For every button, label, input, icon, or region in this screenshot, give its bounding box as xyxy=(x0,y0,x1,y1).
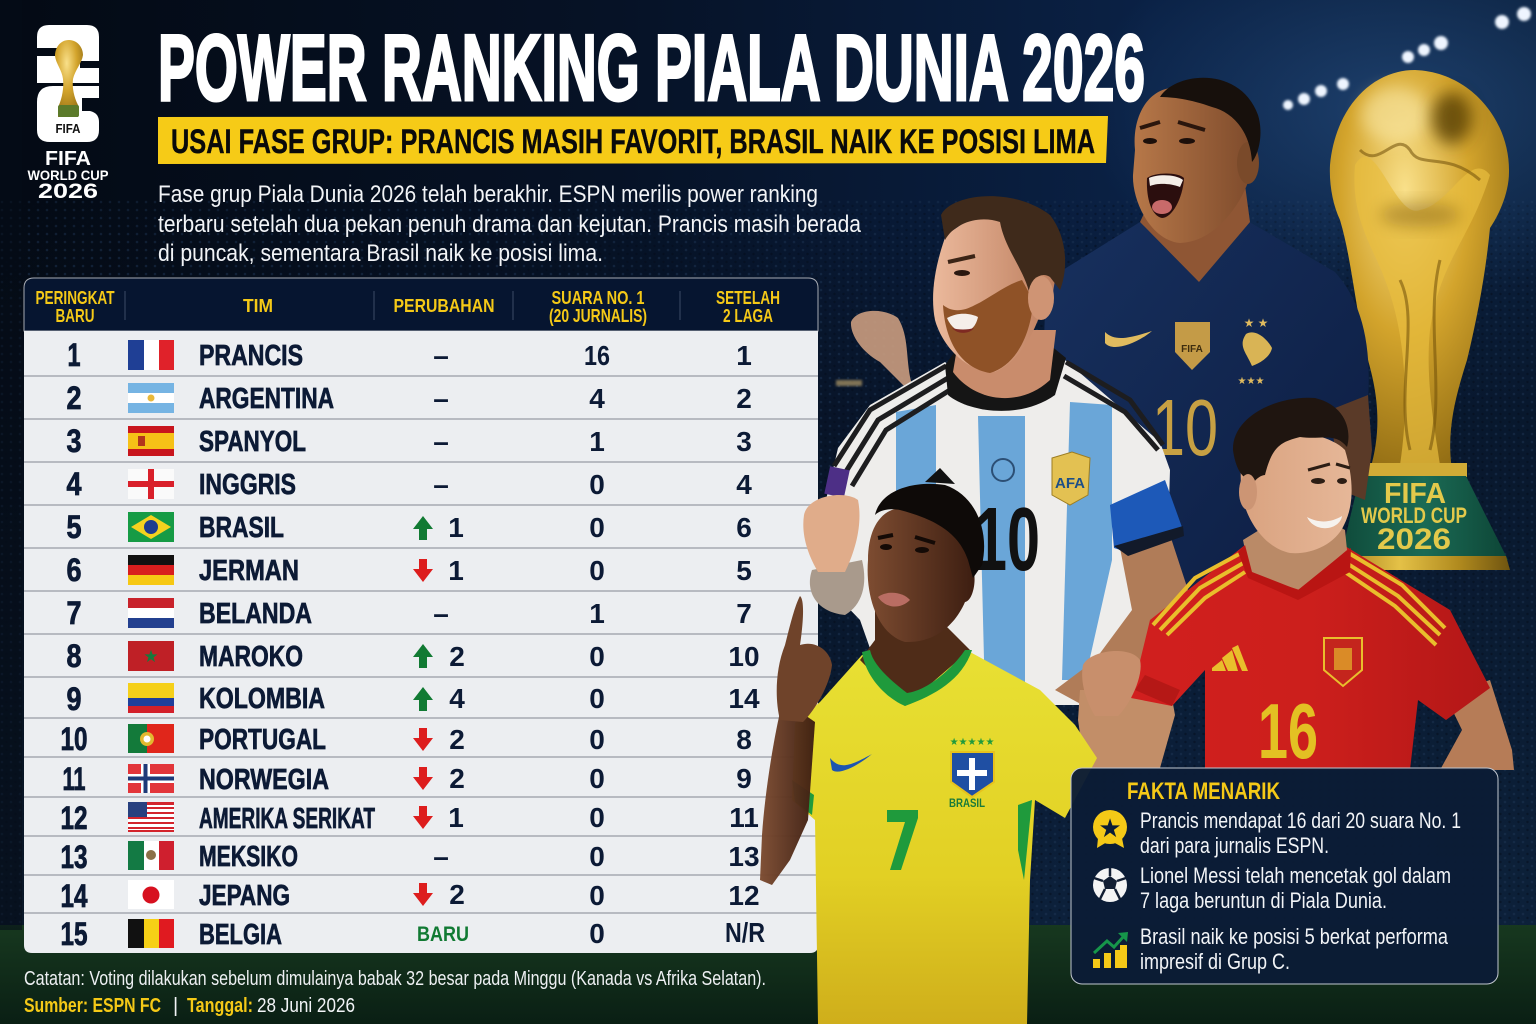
arrow down xyxy=(413,806,433,829)
intro paragraph: terbaru setelah dua pekan penuh drama dan kejutan. Prancis masih berada xyxy=(158,211,862,238)
logo wordmark: 2026 xyxy=(38,180,98,203)
row 9: Kolombia: KOLOMBIA xyxy=(199,683,325,715)
jersey details: France: FIFA xyxy=(1181,344,1203,355)
flag: Morocco xyxy=(128,641,174,671)
row 6: Jerman: 0 xyxy=(589,555,605,586)
arrow up xyxy=(413,687,433,711)
fact 3: Brasil naik ke posisi 5 berkat performa xyxy=(1140,924,1449,949)
row 1: Prancis: 1 xyxy=(736,340,752,371)
source and date: Sumber: ESPN FC xyxy=(24,995,161,1017)
source and date: | xyxy=(173,995,178,1017)
table header: PERINGKAT xyxy=(36,288,115,308)
jersey details: France xyxy=(1105,316,1272,472)
jersey details: Brazil: BRASIL xyxy=(949,796,985,810)
row 5: Brasil xyxy=(66,509,752,545)
row 1: Prancis: 1 xyxy=(68,337,80,373)
table header: PERUBAHAN xyxy=(394,296,494,316)
fact 2: 7 laga beruntun di Piala Dunia. xyxy=(1140,888,1387,913)
row 8: Maroko: 10 xyxy=(728,641,760,672)
source and date xyxy=(24,995,355,1017)
panel heading: FAKTA MENARIK xyxy=(1127,778,1281,805)
row 12: Amerika Serikat: 1 xyxy=(448,802,464,833)
flag: USA xyxy=(128,802,174,832)
row 7: Belanda: 7 xyxy=(66,595,82,631)
player: Brazil number 7 xyxy=(760,484,1097,1024)
row 11: Norwegia: NORWEGIA xyxy=(199,764,329,796)
table header: (20 JURNALIS) xyxy=(549,306,647,326)
row 15: Belgia: 0 xyxy=(589,918,605,949)
row 7: Belanda: 7 xyxy=(736,598,752,629)
flag: Brazil xyxy=(128,512,174,542)
icon: medal star: ★ xyxy=(1098,814,1122,844)
table header: 2 LAGA xyxy=(723,306,773,326)
icon: medal star xyxy=(1093,810,1127,848)
row 12: Amerika Serikat xyxy=(60,800,759,836)
row 3: Spanyol xyxy=(66,423,752,459)
row 14: Jepang xyxy=(60,878,760,914)
row 2: Argentina: – xyxy=(433,383,449,414)
row 9: Kolombia: 0 xyxy=(589,683,605,714)
arrow down xyxy=(413,728,433,751)
row 5: Brasil: BRASIL xyxy=(199,512,284,544)
row 5: Brasil: 0 xyxy=(589,512,605,543)
row 1: Prancis: 16 xyxy=(584,340,610,371)
row 4: Inggris: INGGRIS xyxy=(199,469,296,501)
jersey details: Argentina: AFA xyxy=(1055,475,1085,492)
intro paragraph: di puncak, sementara Brasil naik ke posisi lima. xyxy=(158,240,603,267)
row 6: Jerman: 6 xyxy=(66,552,82,588)
row 13: Meksiko: 13 xyxy=(60,839,88,875)
row 5: Brasil: 6 xyxy=(736,512,752,543)
row 4: Inggris: 4 xyxy=(66,466,82,502)
row 3: Spanyol: – xyxy=(433,426,449,457)
row 13: Meksiko xyxy=(60,839,760,875)
row 3: Spanyol: 1 xyxy=(589,426,605,457)
row 6: Jerman: 1 xyxy=(448,555,464,586)
flag: Netherlands xyxy=(128,598,174,628)
trophy base with text xyxy=(1340,476,1510,570)
row 10: Portugal xyxy=(60,721,752,757)
row 9: Kolombia: 4 xyxy=(449,683,465,714)
jersey details: Brazil xyxy=(830,737,994,870)
row 10: Portugal: 8 xyxy=(736,724,752,755)
flag: Portugal xyxy=(128,724,174,753)
row 12: Amerika Serikat: 0 xyxy=(589,802,605,833)
intro paragraph: Fase grup Piala Dunia 2026 telah berakhir. ESPN merilis power ranking xyxy=(158,181,818,208)
row 1: Prancis xyxy=(68,337,752,373)
source and date: 28 Juni 2026 xyxy=(257,995,355,1017)
row 10: Portugal: PORTUGAL xyxy=(199,724,326,756)
icon: soccer ball xyxy=(1093,868,1127,902)
row 15: Belgia: N/R xyxy=(725,917,765,948)
row 8: Maroko: 0 xyxy=(589,641,605,672)
icon: white 26 emblem: FIFA xyxy=(56,121,81,136)
flag: France xyxy=(128,340,174,370)
row 1: Prancis: PRANCIS xyxy=(199,340,303,372)
panel: fakta menarik xyxy=(1071,768,1498,984)
icon: white 26 emblem xyxy=(37,25,99,142)
flag: Norway xyxy=(128,764,174,793)
arrow down xyxy=(413,883,433,906)
flag: Mexico xyxy=(128,841,174,870)
row 14: Jepang: JEPANG xyxy=(199,880,290,912)
row 3: Spanyol: SPANYOL xyxy=(199,426,306,458)
row 5: Brasil: 5 xyxy=(66,509,82,545)
row 13: Meksiko: – xyxy=(433,841,449,872)
row 12: Amerika Serikat: 12 xyxy=(60,800,88,836)
row 11: Norwegia: 11 xyxy=(62,761,86,797)
row 3: Spanyol: 3 xyxy=(736,426,752,457)
sky blue jersey stripes xyxy=(896,402,1112,700)
row 12: Amerika Serikat: 11 xyxy=(729,802,759,833)
row 15: Belgia: BARU xyxy=(417,923,469,946)
flag: Morocco: ★ xyxy=(143,647,159,666)
icon: growth chart xyxy=(1093,932,1128,968)
row 13: Meksiko: 0 xyxy=(589,841,605,872)
row 15: Belgia: 15 xyxy=(60,916,88,952)
fact 3 xyxy=(1140,924,1449,974)
arm with captain band xyxy=(1055,480,1188,720)
arrow up xyxy=(413,644,433,668)
row 6: Jerman xyxy=(66,552,752,588)
fact 1: dari para jurnalis ESPN. xyxy=(1140,833,1329,858)
row 2: Argentina: 4 xyxy=(589,383,605,414)
flag: Germany xyxy=(128,555,174,585)
logo: FIFA World Cup 2026 xyxy=(28,25,108,203)
footer note: Catatan: Voting dilakukan sebelum dimulainya babak 32 besar pada Minggu (Kanada vs Afrika Selatan). xyxy=(24,968,766,990)
table body xyxy=(24,331,818,953)
row 4: Inggris: 4 xyxy=(736,469,752,500)
fist and forearm left xyxy=(803,495,864,615)
jersey details: Argentina xyxy=(824,452,1090,590)
jersey details: France: 10 xyxy=(1152,383,1218,472)
row 6: Jerman: JERMAN xyxy=(199,555,299,587)
row 4: Inggris xyxy=(66,466,752,502)
table header: TIM xyxy=(243,296,273,316)
row 10: Portugal: 10 xyxy=(60,721,88,757)
row 2: Argentina: ARGENTINA xyxy=(199,383,334,415)
row 9: Kolombia: 14 xyxy=(728,683,760,714)
arrow up xyxy=(413,516,433,540)
fact 2: Lionel Messi telah mencetak gol dalam xyxy=(1140,863,1451,888)
jersey details: Spain: 16 xyxy=(1258,687,1318,775)
flag: Belgium xyxy=(128,919,174,948)
row 15: Belgia: BELGIA xyxy=(199,919,282,951)
trophy base with text: FIFA xyxy=(1384,478,1446,510)
intro paragraph xyxy=(158,181,862,267)
subtitle banner xyxy=(158,116,1108,164)
logo wordmark xyxy=(28,148,108,203)
jersey details: Spain xyxy=(1212,638,1362,775)
fact 1 xyxy=(1140,808,1461,858)
fist: Spain player xyxy=(1082,651,1141,716)
arrow down xyxy=(413,767,433,790)
row 14: Jepang: 12 xyxy=(728,880,760,911)
row 13: Meksiko: 13 xyxy=(728,841,760,872)
row 14: Jepang: 14 xyxy=(60,878,88,914)
jersey details: France: ★ ★ xyxy=(1244,316,1268,330)
row 8: Maroko xyxy=(66,638,760,674)
table header: BARU xyxy=(56,306,94,326)
row 6: Jerman: 5 xyxy=(736,555,752,586)
jersey details: Brazil: ★★★★★ xyxy=(950,737,994,748)
row 9: Kolombia: 9 xyxy=(66,681,82,717)
row 11: Norwegia: 2 xyxy=(449,763,465,794)
row 12: Amerika Serikat: AMERIKA SERIKAT xyxy=(199,803,375,835)
table: power ranking xyxy=(24,278,818,953)
player: Spain number 16 xyxy=(1078,398,1514,775)
jersey details: France: ★★★ xyxy=(1238,376,1264,387)
row 11: Norwegia: 0 xyxy=(589,763,605,794)
row 13: Meksiko: MEKSIKO xyxy=(199,841,298,873)
row 8: Maroko: 2 xyxy=(449,641,465,672)
row 14: Jepang: 0 xyxy=(589,880,605,911)
fact 2 xyxy=(1140,863,1451,913)
arrow down xyxy=(413,559,433,582)
row 5: Brasil: 1 xyxy=(448,512,464,543)
player: France number 10 xyxy=(1044,78,1372,640)
row 4: Inggris: – xyxy=(433,469,449,500)
row 10: Portugal: 0 xyxy=(589,724,605,755)
row 2: Argentina: 2 xyxy=(66,380,82,416)
row 8: Maroko: 8 xyxy=(66,638,82,674)
flag: Japan xyxy=(128,880,174,909)
table header xyxy=(24,278,818,331)
jersey details: Argentina: 10 xyxy=(974,490,1040,590)
table header: SETELAH xyxy=(716,288,780,308)
flag: Colombia xyxy=(128,683,174,713)
row 7: Belanda xyxy=(66,595,752,631)
trophy base with text: 2026 xyxy=(1377,523,1451,556)
row 7: Belanda: 1 xyxy=(589,598,605,629)
trophy: FIFA World Cup xyxy=(1330,70,1510,570)
row 11: Norwegia: 9 xyxy=(736,763,752,794)
logo wordmark: WORLD CUP xyxy=(28,167,108,183)
row 2: Argentina: 2 xyxy=(736,383,752,414)
row 14: Jepang: 2 xyxy=(449,879,465,910)
source and date: Tanggal: xyxy=(187,995,253,1017)
fact 3: impresif di Grup C. xyxy=(1140,949,1290,974)
subtitle banner: USAI FASE GRUP: PRANCIS MASIH FAVORIT, BRASIL NAIK KE POSISI LIMA xyxy=(171,123,1095,161)
row 3: Spanyol: 3 xyxy=(66,423,82,459)
table header: SUARA NO. 1 xyxy=(552,288,644,308)
row 11: Norwegia xyxy=(62,761,752,797)
flag: Argentina xyxy=(128,383,174,413)
row 2: Argentina xyxy=(66,380,752,416)
row 8: Maroko: MAROKO xyxy=(199,641,303,673)
row 15: Belgia xyxy=(60,916,765,952)
flag: Spain xyxy=(128,426,174,456)
logo wordmark: FIFA xyxy=(45,148,91,170)
player: Argentina number 10 xyxy=(803,196,1188,720)
trophy base with text: WORLD CUP xyxy=(1361,503,1467,528)
row 1: Prancis: – xyxy=(433,340,449,371)
row 9: Kolombia xyxy=(66,681,760,717)
row 4: Inggris: 0 xyxy=(589,469,605,500)
row 7: Belanda: BELANDA xyxy=(199,598,312,630)
fact 1: Prancis mendapat 16 dari 20 suara No. 1 xyxy=(1140,808,1461,833)
flag: England xyxy=(128,469,174,499)
row 7: Belanda: – xyxy=(433,598,449,629)
row 10: Portugal: 2 xyxy=(449,724,465,755)
head: Messi xyxy=(933,196,1065,373)
